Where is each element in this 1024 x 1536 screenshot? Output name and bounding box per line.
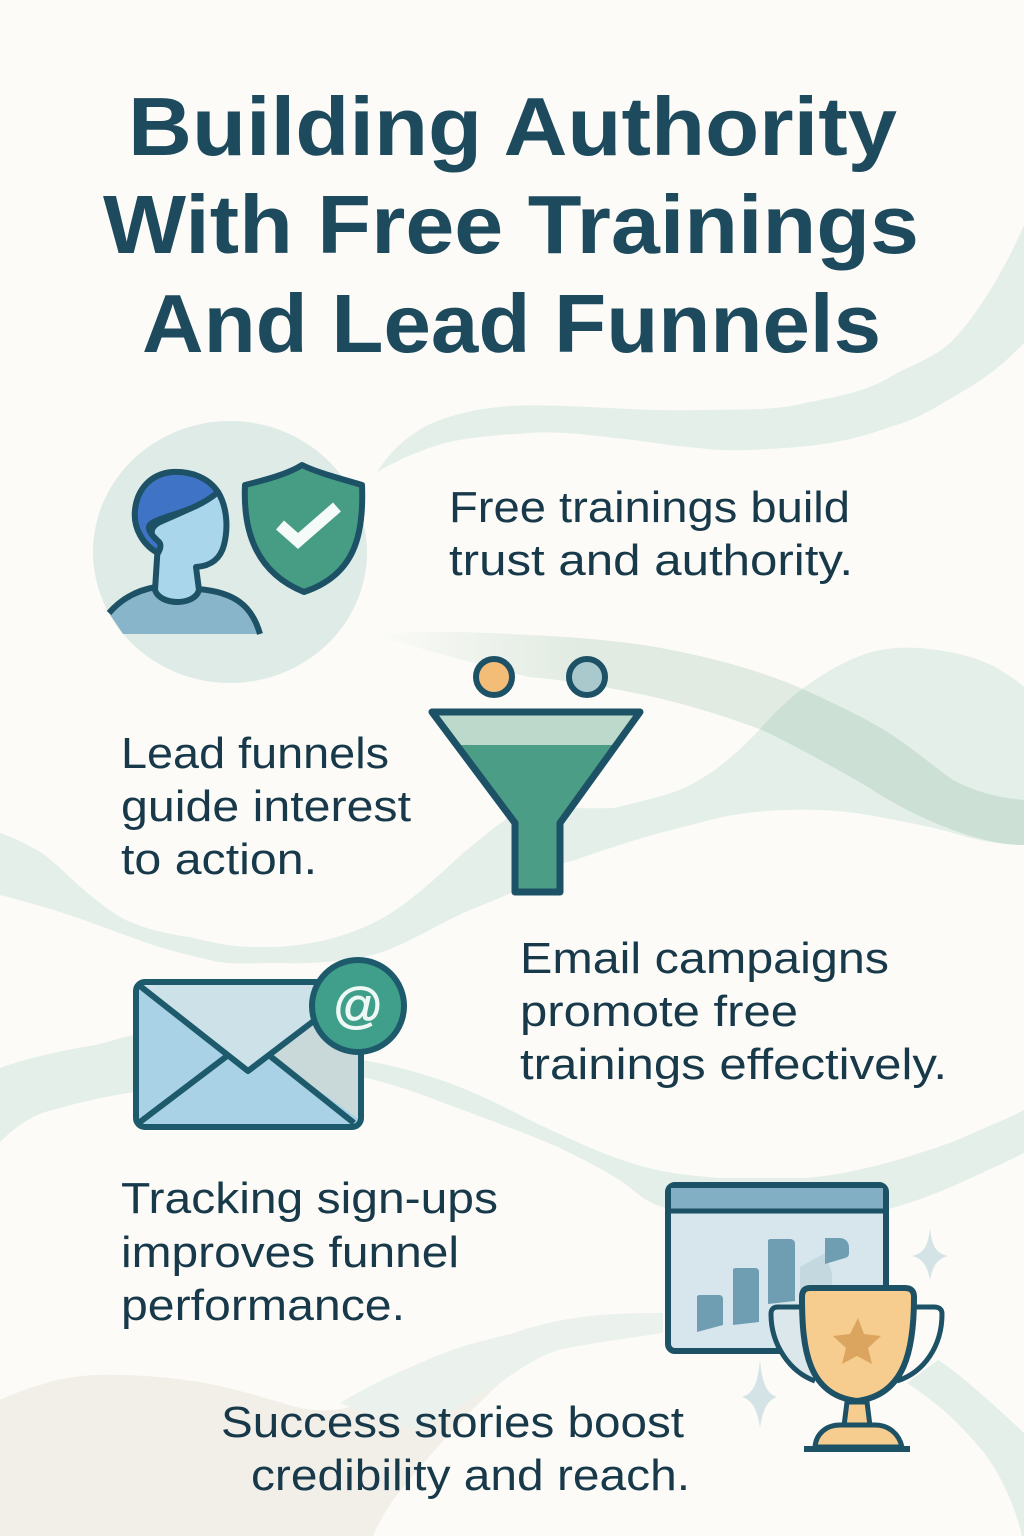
analytics window (667, 1185, 887, 1351)
title: Building Authority (128, 80, 897, 173)
text: free trainings (449, 483, 853, 585)
orange lead dot (476, 659, 512, 695)
title: With Free Trainings (103, 178, 919, 271)
text: lead funnels: to action. (121, 835, 317, 884)
funnel body (432, 712, 640, 892)
at badge (312, 960, 404, 1052)
text: tracking sign-ups: performance. (121, 1281, 405, 1330)
text: free trainings: Free trainings build (449, 483, 850, 532)
text: success stories: credibility and reach. (251, 1451, 690, 1500)
person (109, 472, 260, 634)
text: email campaigns (520, 934, 947, 1089)
icon: dashboard and trophy (667, 1185, 948, 1449)
text: email campaigns: Email campaigns (520, 934, 889, 983)
sparkles (742, 1228, 948, 1428)
text: success stories (221, 1398, 690, 1500)
trophy (771, 1288, 942, 1449)
text: lead funnels: Lead funnels (121, 729, 389, 778)
text: lead funnels: guide interest (121, 782, 411, 831)
title (103, 80, 919, 370)
blue lead dot (569, 659, 605, 695)
text: free trainings: trust and authority. (449, 536, 853, 585)
at badge: @ (333, 978, 383, 1034)
text: tracking sign-ups: Tracking sign-ups (121, 1174, 498, 1223)
text: email campaigns: trainings effectively. (520, 1040, 947, 1089)
text: lead funnels (121, 729, 411, 884)
text: tracking sign-ups (121, 1174, 498, 1330)
text: email campaigns: promote free (520, 987, 798, 1036)
icon: email envelope (136, 960, 404, 1127)
bar chart (697, 1238, 849, 1332)
text: tracking sign-ups: improves funnel (121, 1228, 459, 1277)
envelope (136, 982, 361, 1127)
title: And Lead Funnels (142, 277, 881, 370)
icon background circle (93, 421, 367, 683)
shield (245, 465, 362, 592)
text: success stories: Success stories boost (221, 1398, 684, 1447)
icon: funnel (432, 659, 640, 892)
icon: person with shield (93, 421, 367, 683)
